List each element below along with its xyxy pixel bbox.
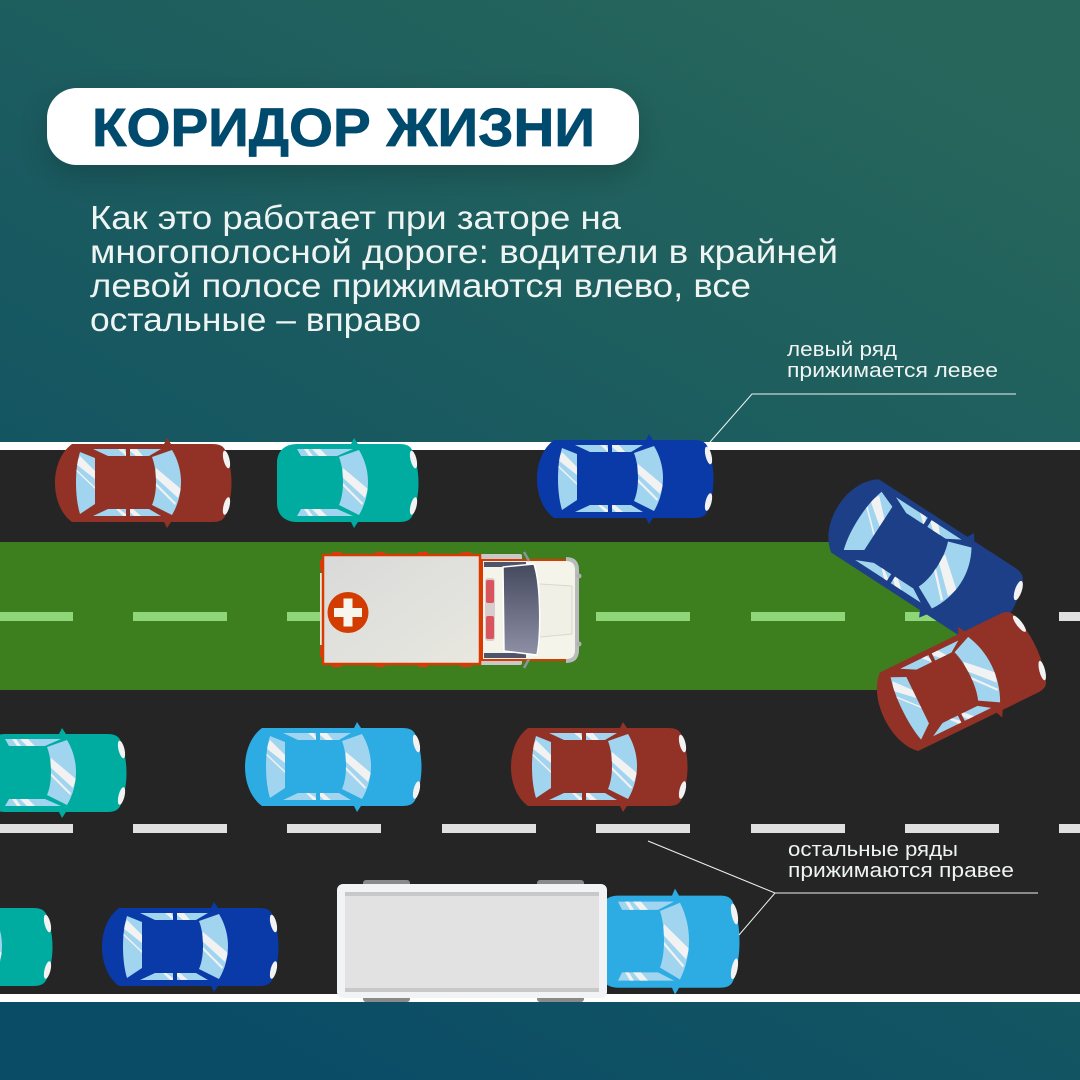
car: light blue, truck cab [598,889,740,995]
car: dark blue, turned [811,463,1036,658]
description text: остальные – вправо [90,301,421,338]
description text: многополосной дороге: водители в крайней [90,233,838,270]
ambulance box [323,555,480,664]
road [0,442,1080,1002]
description text: Как это работает при заторе на [90,199,622,236]
label: other rows: прижимаются правее [788,860,1014,882]
car: red, middle row [511,722,688,812]
label: other rows [648,839,1038,935]
label: left row: прижимается левее [787,360,998,382]
truck trailer [337,880,607,1002]
description text [90,199,838,338]
car: teal, middle row [0,728,127,818]
label: left row [710,339,1016,442]
car: red, turned [862,600,1057,764]
title: КОРИДОР ЖИЗНИ [92,98,595,158]
description text: левой полосе прижимаются влево, все [90,267,751,304]
car: blue, left row [537,434,714,524]
car: blue, bottom row [102,902,279,992]
car: light blue, middle row [245,722,422,812]
lane dashes: lower [0,824,1080,833]
ambulance cross [328,592,368,633]
car: teal, bottom row [0,902,53,992]
corridor of life: green lane [0,542,960,690]
car: teal, left row [277,438,419,528]
lane dashes: corridor [0,612,999,621]
label: left row: левый ряд [787,339,897,361]
car: red, left row [55,438,232,528]
lane dash right [1059,612,1080,621]
label: other rows: остальные ряды [788,839,958,861]
title [47,88,639,165]
ambulance [320,552,582,668]
